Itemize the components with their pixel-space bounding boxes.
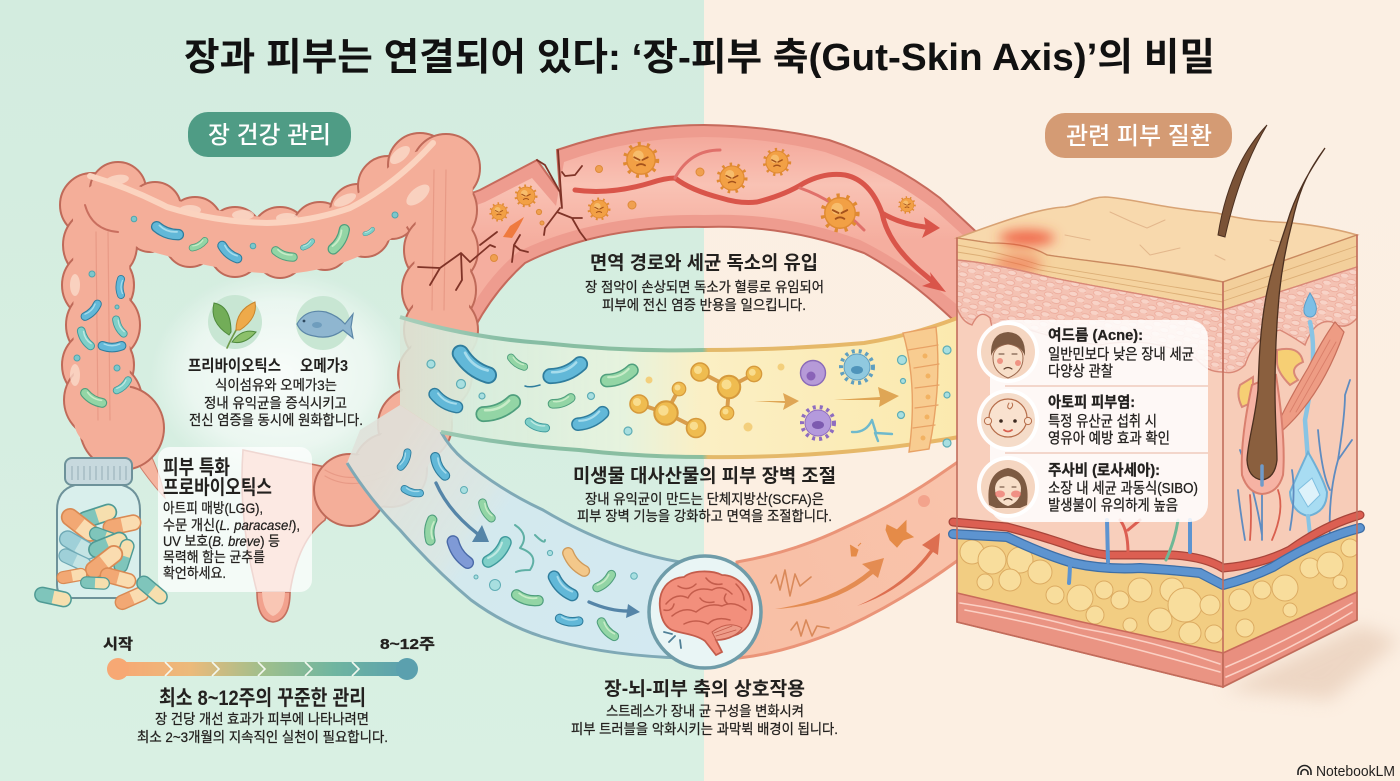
title: 장과 피부는 연결되어 있다: ‘장-피부 축(Gut-Skin Axis)’의 비밀 (184, 37, 1215, 79)
text: atopic dermatitis: 영유아 예방 효과 확인 (1048, 430, 1170, 447)
block edges (957, 235, 1357, 687)
sebaceous glands (1238, 349, 1303, 407)
dermis faces (957, 235, 1357, 687)
epidermis layers (957, 235, 1357, 310)
description: 목력해 함는 균추를 (163, 549, 265, 565)
text: rosacea: 주사비 (로사세아): (1048, 462, 1160, 479)
text: gut-brain-skin axis: 스트레스가 장내 균 구성을 변화시켜 (606, 703, 804, 719)
arrows toward skin barrier (754, 387, 899, 410)
background: green left half (0, 0, 704, 781)
text: acne: 여드름 (Acne): (1048, 327, 1143, 344)
panel: skin-specific probiotics (158, 447, 312, 592)
arrow band: stress response (orange) (737, 457, 965, 658)
text: microbial metabolites: 장내 유익균이 만드는 단체지방산(SCFA)은 (585, 491, 824, 507)
text: acne: 다양상 관찰 (1048, 363, 1113, 380)
text: minimum care period: 장 건당 개선 효과가 피부에 나타나려면 (155, 711, 369, 727)
description: 확언하세요. (163, 565, 226, 581)
sweat duct (1305, 322, 1313, 460)
heading pill: related skin conditions (1045, 113, 1232, 158)
text: immune pathway: 면역 경로와 세균 독소의 유입 (590, 252, 818, 274)
arrow band: immune pathway (red vessel) (440, 125, 985, 350)
upward stress arrows (775, 558, 884, 609)
text: gut-brain-skin axis: 장-뇌-피부 축의 상호작용 (604, 678, 805, 700)
blood vessels (953, 515, 1360, 585)
text: immune pathway: 피부에 전신 염증 반용을 일으킵니다. (602, 297, 806, 313)
muscle layer (957, 592, 1357, 687)
flow arrows to brain (436, 483, 632, 611)
text: rosacea (1048, 462, 1198, 514)
immune cells (800, 351, 892, 441)
text: microbial metabolites: 피부 장벽 기능을 강화하고 면역을 조절합니다. (577, 508, 832, 524)
hair follicle and shafts (1218, 125, 1325, 494)
text: prebiotics description: 전신 염증을 동시에 원화합니다. (189, 412, 363, 428)
logo: NotebookLM: NotebookLM (1316, 763, 1395, 780)
heading (163, 456, 272, 499)
subcutaneous fat (958, 534, 1356, 652)
toxin particles (490, 145, 914, 262)
text: microbial metabolites (573, 465, 836, 524)
inflamed patch (994, 230, 1055, 273)
heading: 피부 특화 (163, 456, 230, 479)
text: minimum care period: 최소 8~12주의 꾸준한 관리 (159, 687, 366, 710)
panel: skin conditions card (977, 320, 1208, 522)
text: minimum care period (137, 687, 388, 745)
text: gut-brain-skin axis (571, 678, 838, 737)
sweat gland (1290, 452, 1327, 516)
text: immune pathway (585, 252, 824, 313)
heading pill: gut health management: 장 건강 관리 (208, 122, 331, 149)
icon: baby face (977, 389, 1039, 451)
text: prebiotics description: 정내 유익균을 증식시키고 (204, 395, 347, 411)
illustration: large intestine (60, 133, 480, 622)
skin barrier cell wall (903, 327, 939, 452)
background: peach right half (704, 0, 1400, 781)
heading pill: gut health management (188, 112, 351, 157)
bacteria in blue band (399, 452, 637, 638)
text: prebiotics description: 식이섬유와 오메가3는 (215, 377, 337, 393)
icon: probiotic capsule bottle (33, 458, 170, 612)
text: microbial metabolites: 미생물 대사산물의 피부 장벽 조절 (573, 465, 836, 487)
text: acne (1048, 327, 1194, 380)
text: prebiotics and omega-3 labels (188, 357, 348, 375)
arrow band: gut-brain (blue) (347, 405, 680, 658)
colon bacteria (74, 212, 398, 404)
arrow band: microbial metabolites (400, 315, 965, 457)
description (163, 500, 300, 581)
description: 수문 개신(L. paracase!), (163, 517, 300, 533)
timeline: 8-12 weeks (103, 636, 435, 680)
text: gut-brain-skin axis: 피부 트러블을 악화시키는 과막뷕 배경이 됩니다. (571, 721, 838, 737)
icon: brain circle (649, 556, 761, 668)
top skin surface (957, 197, 1357, 282)
text: immune pathway: 장 점악이 손상되면 독소가 혈릉로 유임되어 (585, 279, 824, 295)
text: rosacea: 발생불이 유의하게 높음 (1048, 497, 1178, 514)
description: UV 보호(B. breve) 등 (163, 533, 280, 549)
icon: rosacea face (977, 456, 1039, 518)
text: prebiotics description (189, 377, 363, 428)
timeline: 8-12 weeks: 시작 (103, 636, 133, 653)
panel: skin cross-section block (950, 125, 1400, 700)
cellular layer (957, 260, 1357, 373)
icon: acne face (977, 321, 1039, 383)
icon: omega-3 fish (296, 296, 353, 350)
text: atopic dermatitis: 아토피 피부염: (1048, 394, 1135, 411)
metabolite molecules (630, 363, 762, 437)
text: acne: 일반민보다 낮은 장내 세균 (1048, 346, 1194, 363)
timeline: 8-12 weeks: 8~12주 (380, 636, 435, 653)
text: atopic dermatitis: 특정 유산균 섭취 시 (1048, 413, 1157, 430)
text: rosacea: 소장 내 세균 과동식(SIBO) (1048, 480, 1198, 497)
text: prebiotics and omega-3 labels: 프리바이오틱스 (188, 357, 281, 375)
arrector muscle (1278, 322, 1344, 430)
icon: prebiotics leaf (208, 295, 262, 349)
text: atopic dermatitis (1048, 394, 1170, 447)
heading pill: related skin conditions: 관련 피부 질환 (1066, 123, 1212, 150)
cracks in gut wall (418, 150, 586, 290)
text: prebiotics and omega-3 labels: 오메가3 (300, 357, 348, 375)
gut bacteria in band (427, 346, 951, 447)
heading: 프로바이오틱스 (163, 476, 272, 499)
description: 아트피 매방(LGG), (163, 500, 263, 516)
text: minimum care period: 최소 2~3개월의 지속직인 실천이 필요합니다. (137, 729, 388, 745)
nerve branches (1238, 380, 1352, 540)
soft glow behind supplement text (150, 270, 410, 480)
water droplet (1304, 293, 1316, 317)
